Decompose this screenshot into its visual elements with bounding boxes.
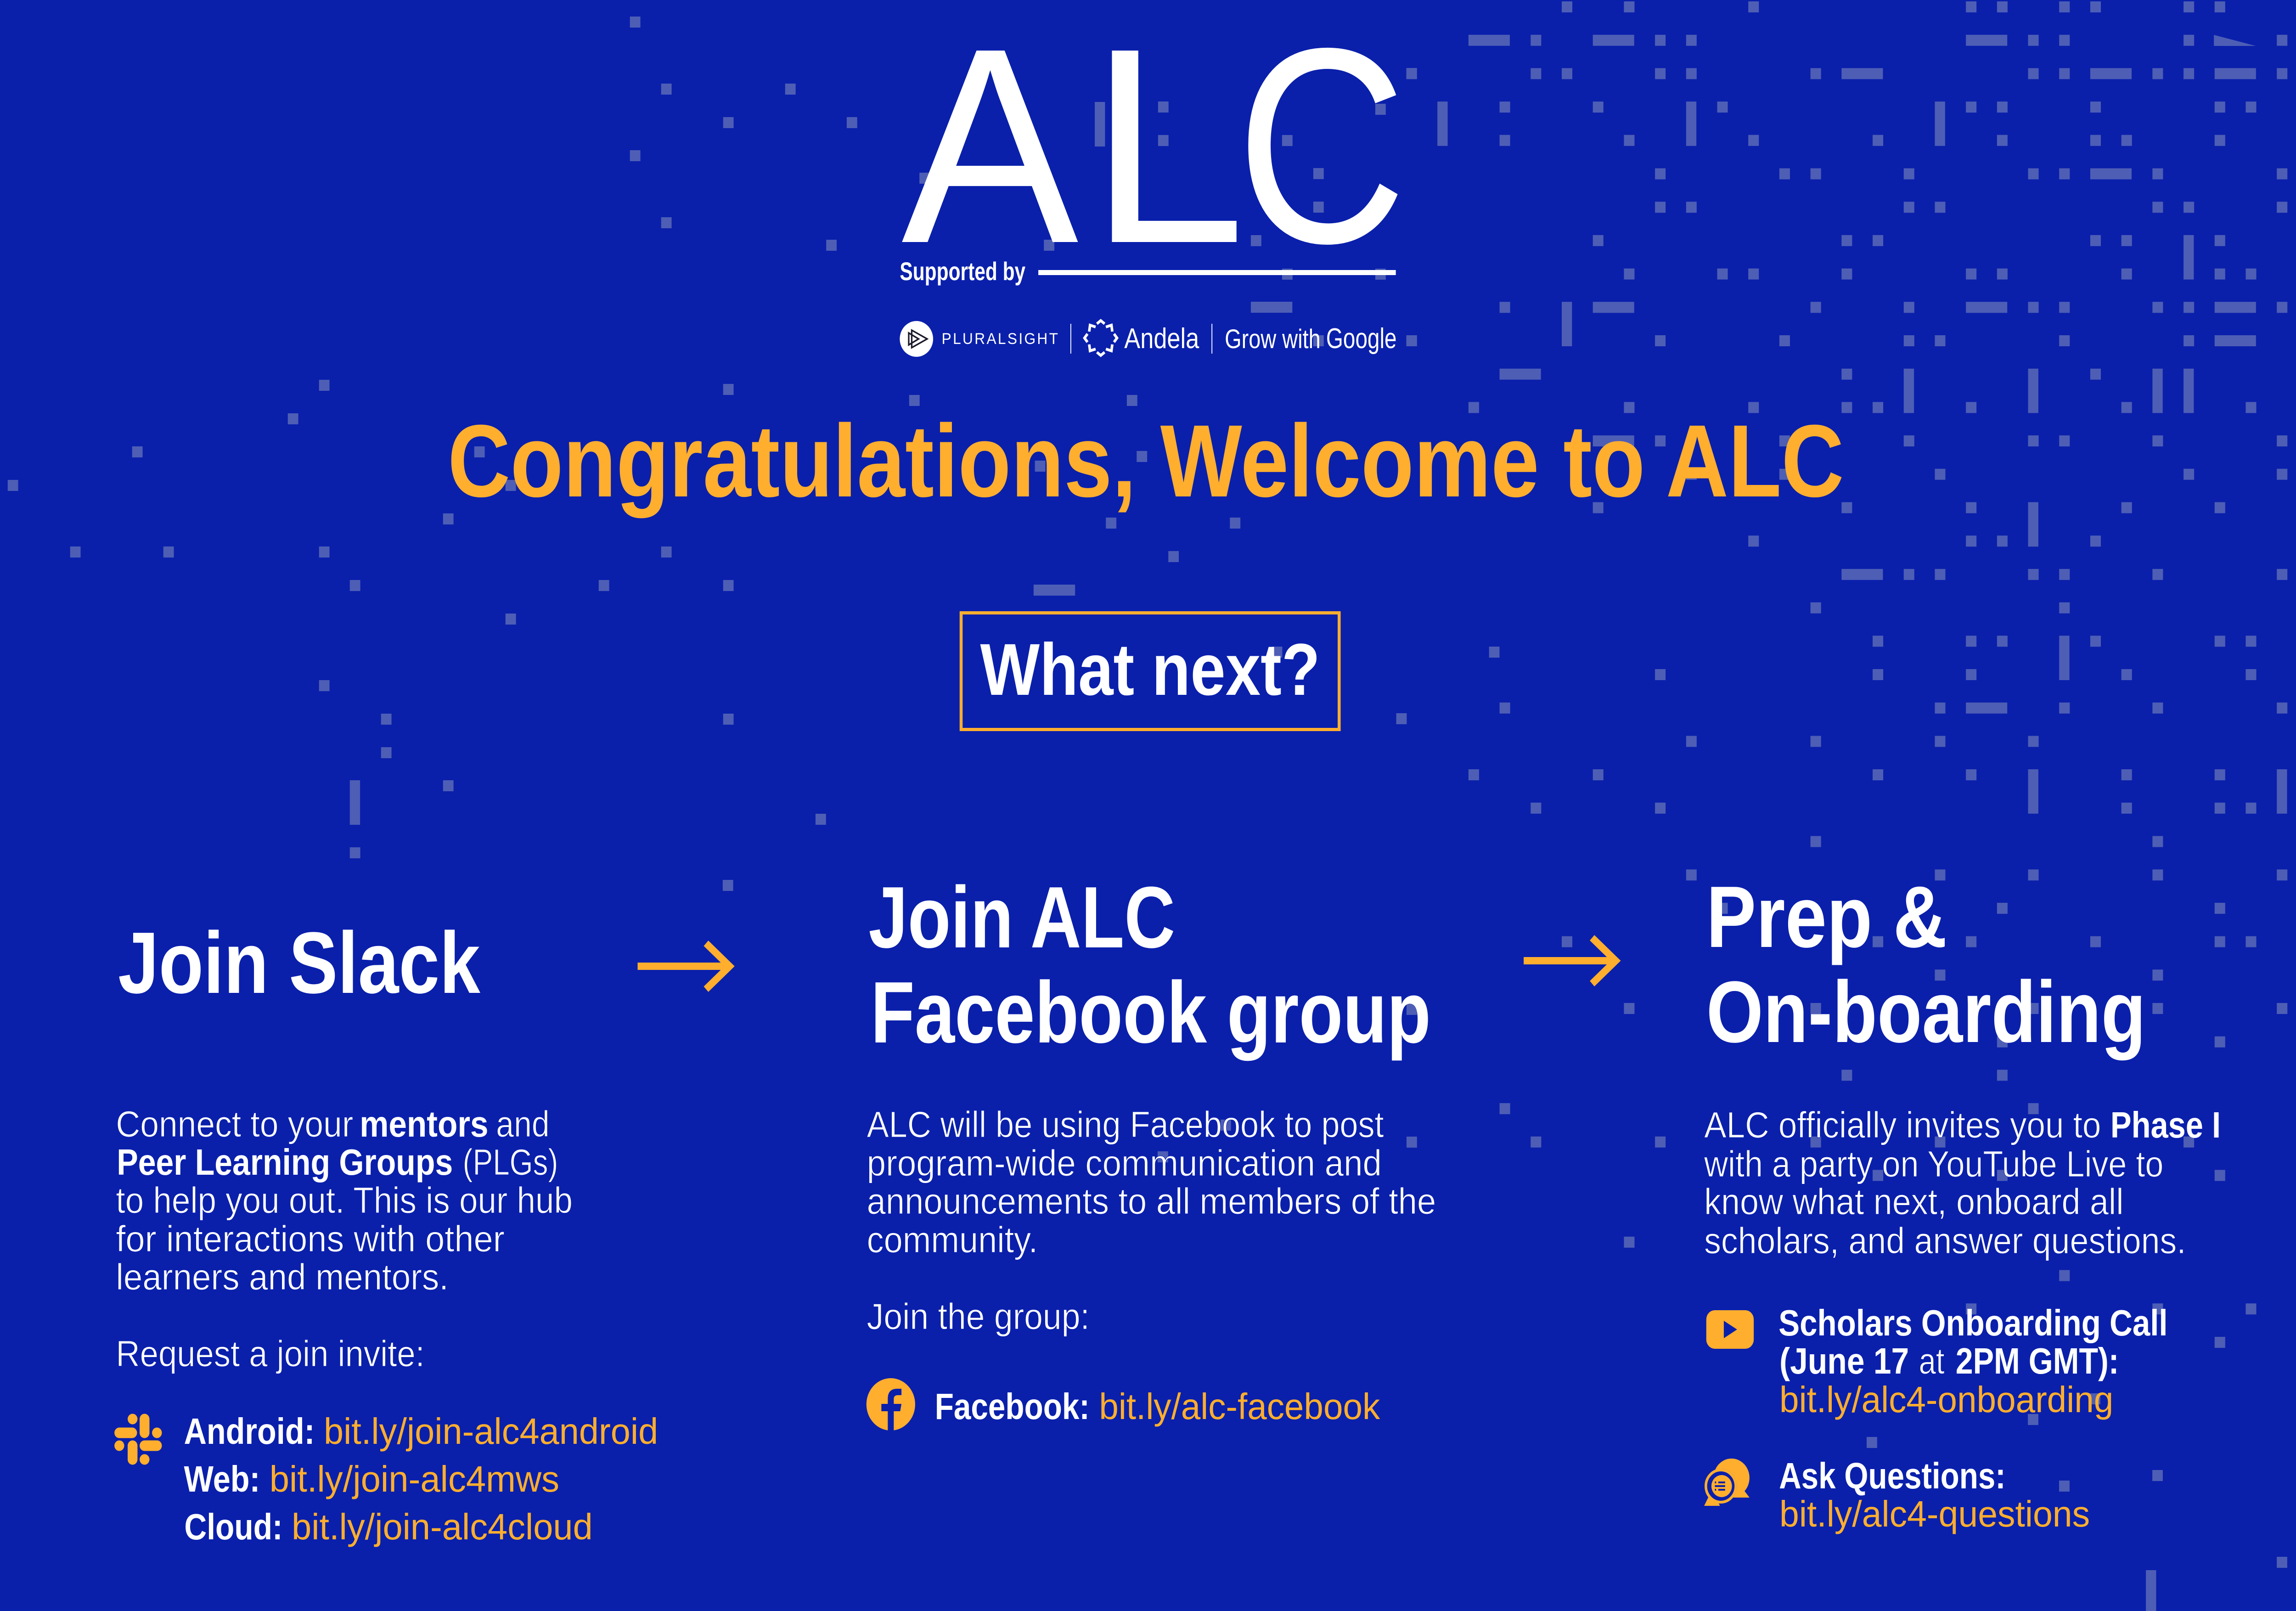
supported by label with rule	[900, 257, 1396, 286]
text block: facebook link	[935, 1386, 1380, 1427]
heading: join slack: Join Slack	[118, 914, 481, 1011]
text block: onboarding description: Phase I	[2110, 1105, 2221, 1146]
text block: onboarding call: at	[1919, 1341, 1944, 1382]
arrow: facebook to onboarding	[1524, 938, 1616, 984]
icon: youtube	[1706, 1310, 1754, 1349]
text block: slack description: mentors	[360, 1104, 489, 1145]
logo: ALC wordmark	[901, 0, 1407, 301]
supported by label with rule: Supported by	[900, 257, 1025, 286]
text block: facebook description: Join the group:	[867, 1296, 1090, 1337]
text block: facebook description: program-wide communication and	[867, 1143, 1382, 1184]
text block: slack description: Peer Learning Groups	[117, 1142, 453, 1183]
heading: join ALC facebook group: Facebook group	[871, 963, 1431, 1061]
text block: facebook description: announcements to all members of the	[867, 1181, 1436, 1222]
text block: onboarding call: Scholars Onboarding Call	[1778, 1303, 2168, 1344]
heading: prep and on-boarding	[1706, 868, 2146, 1060]
arrow: slack to facebook	[638, 943, 731, 989]
text block: facebook description: community.	[867, 1220, 1038, 1261]
text block: onboarding description: with a party on YouTube Live to	[1704, 1144, 2163, 1185]
heading: prep and on-boarding: Prep &	[1706, 868, 1947, 965]
icon: facebook	[867, 1378, 915, 1431]
text block: ask questions	[1779, 1456, 2090, 1535]
heading: join ALC facebook group: Join ALC	[868, 868, 1175, 966]
text block: onboarding call: 2PM GMT):	[1956, 1341, 2119, 1382]
text block: onboarding description: know what next, onboard all	[1704, 1182, 2124, 1222]
text block: slack description: Request a join invite:	[116, 1334, 425, 1374]
text block: onboarding description	[1704, 1105, 2221, 1262]
text block: facebook description: ALC will be using Facebook to post	[867, 1104, 1384, 1145]
text block: slack links: bit.ly/join-alc4mws	[270, 1459, 559, 1500]
logo: Pluralsight	[900, 321, 1058, 357]
text block: facebook link: bit.ly/alc-facebook	[1099, 1386, 1380, 1427]
text block: slack links: Web:	[184, 1459, 260, 1500]
logo: Andela	[1085, 321, 1199, 355]
title: Congratulations, Welcome to ALC	[448, 403, 1844, 518]
panel: join facebook group	[867, 868, 1436, 1431]
text block: slack description: for interactions with other	[116, 1219, 505, 1260]
logo: Andela: Andela	[1124, 322, 1199, 354]
logo: Grow with Google	[1225, 322, 1397, 354]
text block: slack links	[184, 1411, 658, 1548]
text block: ask questions: Ask Questions:	[1779, 1456, 2006, 1497]
text block: slack description: and	[496, 1104, 550, 1145]
panel: join slack	[116, 914, 658, 1548]
text block: onboarding call: bit.ly/alc4-onboarding	[1779, 1380, 2113, 1420]
callout: what next	[961, 613, 1339, 729]
heading: prep and on-boarding: On-boarding	[1706, 963, 2146, 1060]
text block: onboarding description: ALC officially invites you to	[1704, 1105, 2101, 1146]
heading: join ALC facebook group	[868, 868, 1431, 1061]
text block: slack description: learners and mentors.	[116, 1257, 449, 1298]
text block: facebook link: Facebook:	[935, 1386, 1090, 1427]
text block: facebook description	[867, 1104, 1436, 1337]
text block: slack description	[116, 1104, 573, 1374]
icon: slack	[119, 1419, 157, 1459]
text block: onboarding call	[1778, 1303, 2168, 1420]
logo: Grow with Google: Google	[1326, 322, 1397, 354]
text block: ask questions: bit.ly/alc4-questions	[1779, 1494, 2090, 1535]
text block: slack description: (PLGs)	[463, 1142, 558, 1183]
callout: what next: What next?	[980, 628, 1320, 710]
text block: onboarding call: (June 17	[1779, 1341, 1909, 1382]
logo: Pluralsight: PLURALSIGHT	[942, 330, 1058, 347]
icon: chat bubbles	[1704, 1459, 1750, 1506]
panel: prep and on-boarding	[1704, 868, 2221, 1535]
logo: Grow with Google: Grow with	[1225, 324, 1321, 354]
text block: onboarding description: scholars, and answer questions.	[1704, 1221, 2186, 1262]
text block: slack links: Cloud:	[184, 1507, 283, 1548]
text block: slack description: to help you out. This is our hub	[116, 1180, 573, 1221]
text block: slack links: bit.ly/join-alc4android	[324, 1411, 658, 1452]
text block: slack description: Connect to your	[116, 1104, 353, 1145]
text block: slack links: bit.ly/join-alc4cloud	[292, 1507, 593, 1548]
logo: ALC wordmark: C	[1236, 0, 1407, 301]
text block: slack links: Android:	[184, 1411, 315, 1452]
